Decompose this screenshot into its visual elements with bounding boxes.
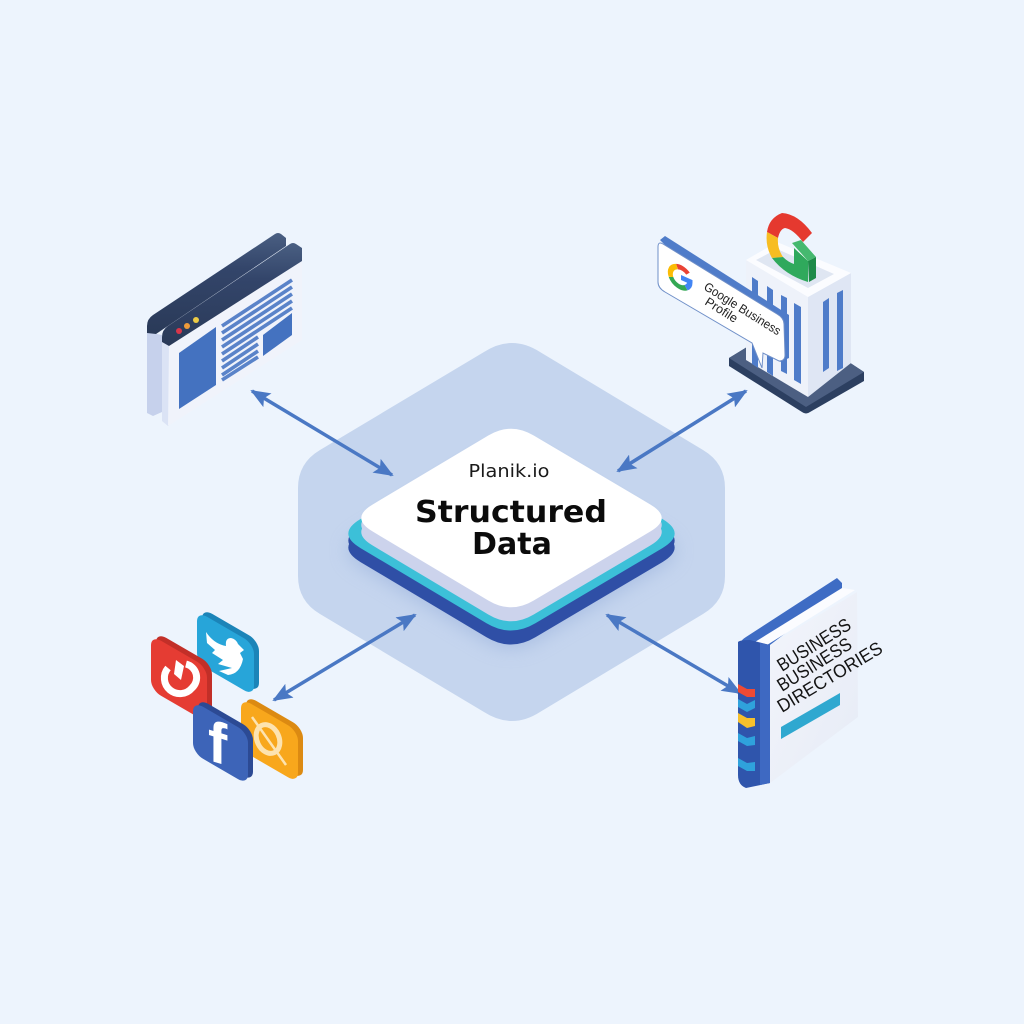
building base	[729, 322, 864, 414]
platform shadow	[348, 454, 675, 648]
spine highlight	[760, 643, 770, 785]
large Google G logo	[767, 213, 816, 282]
bubble label second line: Profile	[702, 295, 740, 326]
book title line 1: BUSINESS	[773, 614, 855, 675]
platform teal layer	[348, 437, 675, 631]
base top face	[729, 322, 864, 407]
book front cover	[770, 592, 858, 783]
bubble label: Google Business	[701, 280, 783, 338]
image block right	[263, 313, 292, 356]
book top cover edge	[738, 578, 842, 650]
platform lavender layer	[361, 436, 662, 621]
Twitter tile	[197, 608, 259, 696]
left face stripes	[752, 277, 801, 384]
building right face	[808, 273, 851, 397]
icon: Google Business Profile building	[658, 213, 864, 414]
red tile	[151, 632, 212, 722]
speech bubble	[658, 236, 789, 368]
front window title bar	[162, 243, 302, 346]
arrow: business directories to center	[607, 615, 740, 693]
Facebook tile	[193, 698, 253, 785]
bubble blue edge	[660, 236, 789, 362]
icon: social media tiles	[151, 608, 303, 785]
orange tile	[241, 695, 303, 783]
front window body	[168, 261, 302, 426]
icon: website windows	[147, 233, 302, 426]
small Google G logo	[670, 263, 690, 291]
book title line 2: BUSINESS	[773, 633, 855, 695]
right face stripes	[823, 290, 843, 372]
heading: Data: Data	[472, 527, 552, 562]
heading: Structured: Structured	[415, 495, 607, 530]
back window title bar	[147, 233, 286, 334]
text lines	[222, 280, 292, 380]
arrow: social media to center	[274, 615, 415, 700]
Facebook tile: f	[208, 707, 228, 779]
platform base: dark blue layer	[348, 444, 675, 645]
book spine	[738, 640, 770, 788]
back window side	[147, 332, 162, 416]
bubble face	[658, 243, 785, 368]
book teal bar	[781, 693, 840, 739]
building roof	[746, 242, 851, 297]
platform white top	[361, 429, 662, 607]
building left face	[746, 260, 808, 397]
roof recess	[756, 249, 834, 288]
arrow: website to center	[252, 391, 392, 475]
window control dots	[176, 317, 199, 334]
book title line 3: DIRECTORIES	[773, 637, 886, 716]
arrow: Google Business Profile to center	[618, 391, 746, 471]
image block left	[179, 327, 216, 409]
panel: central structured data platform	[348, 429, 675, 648]
icon: business directories book	[738, 578, 886, 788]
book pages edge	[750, 588, 855, 645]
spine colour bands	[738, 684, 755, 771]
front window side	[162, 342, 169, 426]
brand label: Planik.io	[468, 461, 550, 482]
background hexagon	[298, 343, 725, 721]
